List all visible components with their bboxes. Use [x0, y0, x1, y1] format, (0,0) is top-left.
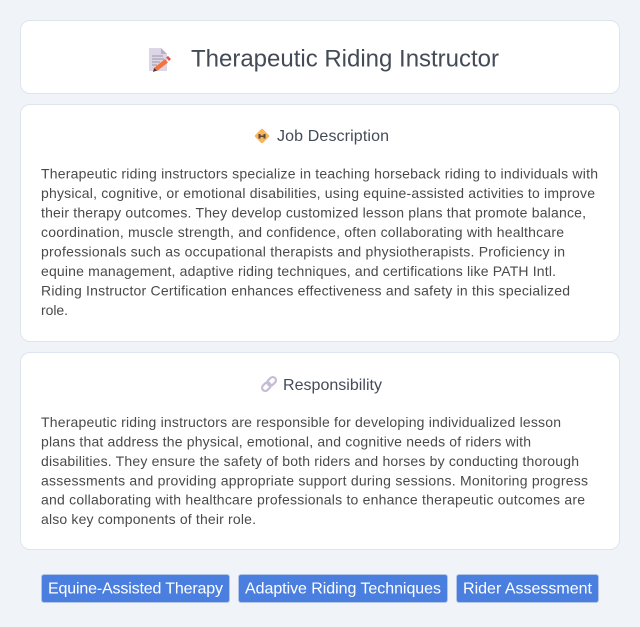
- panel: responsibility: [20, 352, 620, 550]
- text block: job description: coordination, muscle strength, and confidence, often collaborating with healthcare: [41, 224, 564, 240]
- text block: responsibility: disabilities. They ensure the safety of both riders and horses by conducting thorough: [41, 452, 579, 468]
- text block: responsibility: plans that address the physical, emotional, and cognitive needs of riders with: [41, 433, 531, 449]
- text block: job description: Therapeutic riding instructors specialize in teaching horseback riding to individuals with: [41, 166, 598, 182]
- text block: job description: their therapy outcomes. They develop customized lesson plans that promote balance,: [41, 204, 586, 220]
- icon: orange diamond: [254, 128, 270, 144]
- tag: rider assessment: Rider Assessment: [463, 580, 593, 598]
- panel: job description: [20, 104, 620, 342]
- text block: job description: role.: [41, 302, 68, 318]
- tag: rider assessment: [456, 574, 599, 603]
- text block: job description: physical, cognitive, or emotional disabilities, using equine-assisted activities to improve: [41, 185, 595, 201]
- text block: job description: [41, 166, 598, 318]
- icon: document with pencil: [149, 48, 171, 72]
- tag: equine-assisted therapy: [41, 574, 230, 603]
- icon: chain link: [261, 376, 277, 392]
- tag: equine-assisted therapy: Equine-Assisted Therapy: [48, 580, 223, 598]
- text block: responsibility: [41, 414, 588, 527]
- text block: responsibility: assessments and providing appropriate support during sessions. Monitoring progress: [41, 472, 588, 488]
- panel: title card: [20, 20, 620, 94]
- title: Therapeutic Riding Instructor: [191, 46, 499, 72]
- text block: responsibility: Therapeutic riding instructors are responsible for developing individualized lesson: [41, 414, 561, 430]
- text block: responsibility: also key components of their role.: [41, 510, 256, 526]
- text block: job description: Riding Instructor Certification enhances effectiveness and safety in this specialized: [41, 282, 570, 298]
- tag: adaptive riding techniques: Adaptive Riding Techniques: [245, 580, 441, 598]
- text block: job description: professionals such as occupational therapists and physiotherapists. Proficiency in: [41, 244, 565, 260]
- tag: adaptive riding techniques: [238, 574, 448, 603]
- text block: job description: equine management, adaptive riding techniques, and certifications like PATH Intl.: [41, 263, 556, 279]
- heading: responsibility: Responsibility: [283, 376, 382, 394]
- heading: job description: Job Description: [277, 128, 389, 145]
- text block: responsibility: and collaborating with healthcare professionals to enhance therapeutic outcomes are: [41, 491, 585, 507]
